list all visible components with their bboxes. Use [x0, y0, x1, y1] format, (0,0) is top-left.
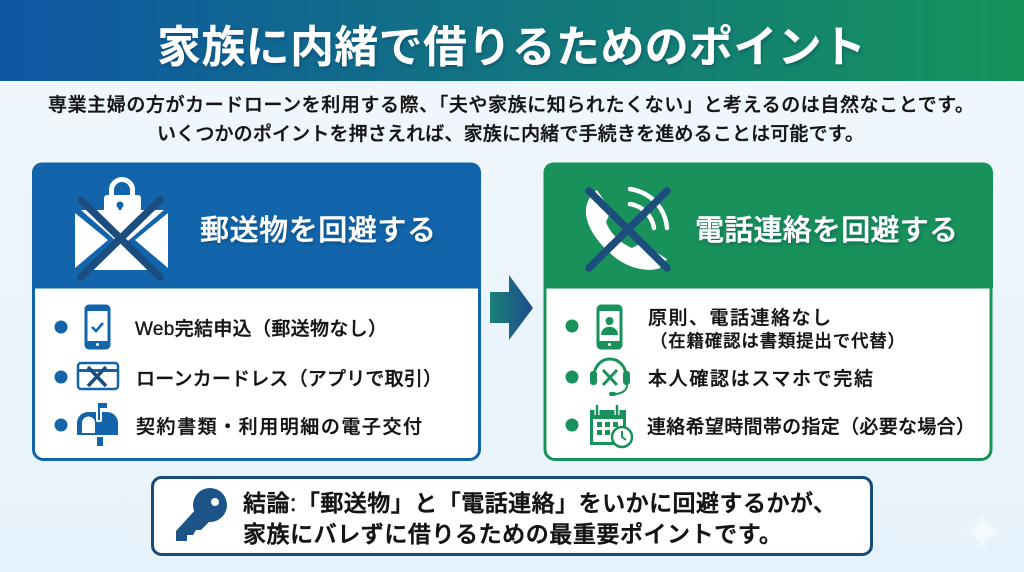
intro text	[48, 93, 974, 145]
conclusion text: 結論:「郵送物」と「電話連絡」をいかに回避するかが、	[243, 490, 836, 516]
title banner	[0, 0, 1024, 81]
panel: avoid phone calls	[544, 162, 993, 460]
list item: identity check: 本人確認はスマホで完結	[648, 368, 873, 390]
list item: web application: Web完結申込（郵送物なし）	[135, 318, 387, 340]
list item: cardless	[54, 363, 442, 390]
title: 家族に内緒で借りるためのポイント	[157, 23, 866, 72]
list item: web application	[54, 306, 387, 348]
panel heading: 電話連絡を回避する	[695, 214, 958, 247]
list item: preferred time: 連絡希望時間帯の指定（必要な場合）	[647, 416, 975, 438]
list item: electronic documents	[54, 403, 422, 446]
list item: preferred time	[566, 406, 975, 447]
intro text: 専業主婦の方がカードローンを利用する際、「夫や家族に知られたくない」と考えるのは自然なことです。	[48, 93, 974, 116]
list item: identity check	[566, 359, 873, 396]
list item: electronic documents: 契約書類・利用明細の電子交付	[136, 416, 422, 438]
conclusion text	[243, 490, 836, 547]
list item: no phone contact: （在籍確認は書類提出で代替）	[650, 331, 905, 351]
callout: conclusion	[152, 478, 872, 554]
icon: crossed-out locked envelope	[75, 180, 168, 277]
panel: avoid mail	[32, 162, 481, 460]
list item: no phone contact	[566, 306, 905, 351]
conclusion text: 家族にバレずに借りるための最重要ポイントです。	[243, 521, 782, 547]
icon: crossed-out phone	[586, 189, 667, 270]
list item: no phone contact: 原則、電話連絡なし	[648, 307, 831, 329]
arrow	[490, 275, 533, 340]
icon: sparkle	[964, 513, 1000, 549]
panel heading: 郵送物を回避する	[200, 214, 436, 247]
list item: cardless: ローンカードレス（アプリで取引）	[136, 368, 442, 390]
intro text: いくつかのポイントを押さえれば、家族に内緒で手続きを進めることは可能です。	[157, 123, 864, 145]
icon: key	[176, 488, 227, 541]
